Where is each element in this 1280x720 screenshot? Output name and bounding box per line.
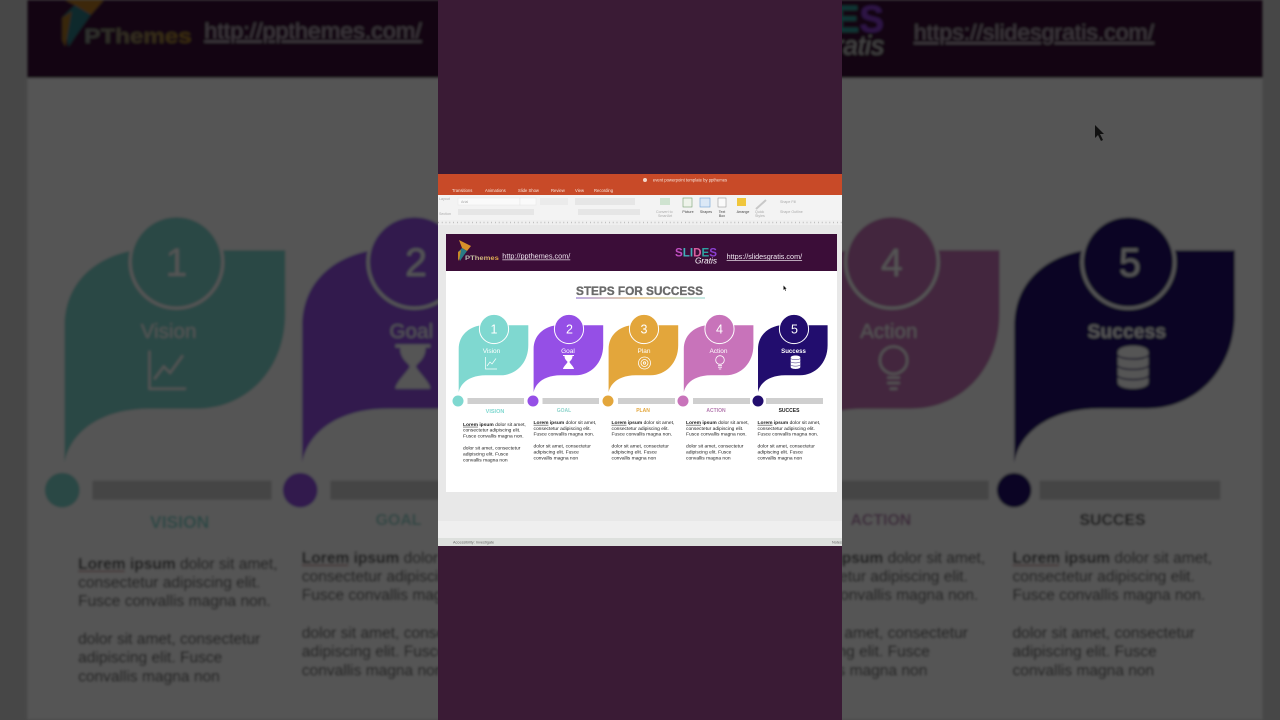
icon: database xyxy=(791,355,800,369)
background: enlarged dimmed slide: convallis magna non xyxy=(302,662,443,679)
background: enlarged dimmed slide: consectetur adipiscing elit. xyxy=(302,568,484,585)
ribbon tabs xyxy=(452,188,614,193)
background: enlarged dimmed slide: VISION xyxy=(150,512,209,532)
step 4: action: Action xyxy=(709,348,728,355)
step 1: vision xyxy=(452,314,528,463)
ribbon toolbar: Section xyxy=(439,212,451,216)
background: enlarged dimmed slide: Lorem ipsum dolor sit amet, xyxy=(786,550,985,567)
background: enlarged dimmed slide: GOAL xyxy=(376,512,422,529)
logo: Slides Gratis: SLIDES xyxy=(675,246,717,260)
step 2: goal: Goal xyxy=(561,348,575,355)
step 1: vision: Lorem ipsum dolor sit amet, xyxy=(463,423,526,428)
step 2: goal: consectetur adipiscing elit. xyxy=(534,426,591,432)
icon: light bulb xyxy=(716,356,724,369)
background: enlarged dimmed slide: Fusce convallis magna non. xyxy=(1013,587,1205,604)
background: enlarged dimmed slide: Action xyxy=(860,320,917,343)
background: enlarged dimmed slide: Fusce convallis magna non. xyxy=(302,587,494,604)
background: enlarged dimmed slide: PThemes xyxy=(84,25,192,48)
ribbon toolbar: Box xyxy=(719,214,725,218)
background: enlarged dimmed slide: adipiscing elit. Fusce xyxy=(549,644,694,661)
background: enlarged dimmed slide: Fusce convallis magna non. xyxy=(78,593,271,610)
background: enlarged dimmed slide: dolor sit amet, consectetur xyxy=(549,625,732,642)
icon: line chart xyxy=(486,357,497,369)
ribbon tabs: Recording xyxy=(594,188,614,193)
step 2: goal: 2 xyxy=(566,322,573,336)
step 3: plan: PLAN xyxy=(636,408,650,414)
step 2: goal: GOAL xyxy=(557,408,571,414)
step 3: plan: Lorem ipsum dolor sit amet, xyxy=(612,421,674,426)
background: enlarged dimmed slide: Lorem ipsum dolor sit amet, xyxy=(549,550,749,567)
ribbon toolbar: Shape Fill xyxy=(780,200,796,204)
ribbon toolbar: Shapes xyxy=(700,210,712,214)
ribbon tabs: View xyxy=(575,188,585,193)
step 1: vision: Fusce convallis magna non. xyxy=(463,434,524,440)
notes area xyxy=(438,521,842,538)
step 3: plan: adipiscing elit. Fusce xyxy=(612,450,657,456)
step 2: goal: Lorem ipsum dolor sit amet, xyxy=(534,421,596,426)
step 1: vision: adipiscing elit. Fusce xyxy=(463,451,509,457)
ribbon toolbar: Arial xyxy=(461,200,468,204)
background: enlarged dimmed slide: adipiscing elit. Fusce xyxy=(302,644,446,661)
step 5: success xyxy=(752,314,828,461)
icon: hourglass xyxy=(563,355,574,369)
background: enlarged dimmed slide: dolor sit amet, consectetur xyxy=(786,625,968,642)
background: enlarged dimmed slide: Fusce convallis magna non. xyxy=(549,587,742,604)
ribbon toolbar: Quick xyxy=(755,210,764,214)
step 5: success: Fusce convallis magna non. xyxy=(758,432,818,438)
background: enlarged dimmed slide: Lorem ipsum dolor sit amet, xyxy=(1013,550,1212,567)
step 3: plan xyxy=(602,314,678,461)
ribbon toolbar: Layout xyxy=(439,197,450,201)
ribbon tabs: Transitions xyxy=(452,188,472,193)
step 2: goal: convallis magna non xyxy=(534,455,578,461)
background: enlarged dimmed slide: consectetur adipiscing elit. xyxy=(549,568,732,585)
step 1: vision: VISION xyxy=(486,409,504,415)
ribbon toolbar: Text xyxy=(719,210,725,214)
slide xyxy=(446,234,837,492)
background: enlarged dimmed slide: 1 xyxy=(165,241,187,285)
background: enlarged dimmed slide: adipiscing elit. Fusce xyxy=(786,644,930,661)
background: enlarged dimmed slide: convallis magna non xyxy=(1013,662,1154,679)
step 1: vision: 1 xyxy=(491,322,498,336)
step 4: action: adipiscing elit. Fusce xyxy=(686,450,732,456)
step 4: action: Fusce convallis magna non. xyxy=(686,432,747,438)
step 4: action: ACTION xyxy=(706,408,726,414)
background: enlarged dimmed slide: Lorem ipsum dolor sit amet, xyxy=(78,556,278,573)
background: enlarged dimmed slide: 4 xyxy=(881,241,903,285)
background: enlarged dimmed slide: 2 xyxy=(405,241,427,285)
icon: target xyxy=(638,357,650,369)
step 5: success: convallis magna non xyxy=(758,455,802,461)
step 4: action: Lorem ipsum dolor sit amet, xyxy=(686,421,749,426)
ribbon tabs: Review xyxy=(551,188,566,193)
step 3: plan: Plan xyxy=(637,348,651,355)
ribbon toolbar: SmartArt xyxy=(658,214,672,218)
background: enlarged dimmed slide: dolor sit amet, consectetur xyxy=(302,625,484,642)
step 1: vision: dolor sit amet, consectetur xyxy=(463,446,521,452)
background: enlarged dimmed slide: convallis magna non xyxy=(78,668,220,685)
icon: mouse cursor xyxy=(784,286,787,291)
status bar: Accessibility: Investigate xyxy=(453,540,494,544)
step 2: goal: dolor sit amet, consectetur xyxy=(534,444,591,450)
step 3: plan: 3 xyxy=(641,322,648,336)
background: enlarged dimmed slide: dolor sit amet, consectetur xyxy=(78,631,260,648)
logo: PThemes: PThemes xyxy=(465,255,499,262)
background: enlarged dimmed slide: Goal xyxy=(389,320,433,343)
step 5: success: dolor sit amet, consectetur xyxy=(758,444,815,450)
background: enlarged dimmed slide: dolor sit amet, consectetur xyxy=(1013,625,1195,642)
step 2: goal: adipiscing elit. Fusce xyxy=(534,450,579,456)
step 3: plan: Fusce convallis magna non. xyxy=(612,432,672,438)
step 4: action xyxy=(678,314,753,461)
background: enlarged dimmed slide: Fusce convallis magna non. xyxy=(786,587,978,604)
slide header banner xyxy=(446,234,837,271)
step 4: action: dolor sit amet, consectetur xyxy=(686,444,744,450)
step 1: vision: Vision xyxy=(483,348,501,355)
step 5: success: 5 xyxy=(791,322,798,336)
title bar xyxy=(438,174,842,195)
step 3: plan: consectetur adipiscing elit. xyxy=(612,426,669,432)
background: enlarged dimmed slide: Gratis xyxy=(814,30,884,60)
step 3: plan: convallis magna non xyxy=(612,455,656,461)
status bar: Notes xyxy=(832,540,842,544)
ribbon toolbar: Shape Outline xyxy=(780,210,803,214)
step 5: success: adipiscing elit. Fusce xyxy=(758,450,803,456)
logo: Slides Gratis: Gratis xyxy=(695,256,718,266)
step 2: goal xyxy=(528,314,603,461)
logo: PThemes xyxy=(458,240,499,262)
step 4: action: consectetur adipiscing elit. xyxy=(686,426,743,432)
background: enlarged dimmed slide: https://slidesgratis.com/ xyxy=(914,20,1155,45)
background: enlarged dimmed slide: 5 xyxy=(1119,241,1141,285)
step 5: success: Lorem ipsum dolor sit amet, xyxy=(758,421,820,426)
background: enlarged dimmed slide: ACTION xyxy=(850,512,911,529)
title: STEPS FOR SUCCESS xyxy=(576,284,703,298)
background: enlarged dimmed slide: consectetur adipiscing elit. xyxy=(78,574,260,591)
step 5: success: Success xyxy=(781,348,806,355)
background: enlarged dimmed slide: Lorem ipsum dolor sit amet, xyxy=(302,550,501,567)
bottom purple band xyxy=(438,546,842,720)
top purple band xyxy=(438,0,842,174)
step 2: goal: Fusce convallis magna non. xyxy=(534,432,594,438)
background: enlarged dimmed slide: PLAN xyxy=(628,512,671,529)
ribbon toolbar: Convert to xyxy=(656,210,673,214)
step 1: vision: consectetur adipiscing elit. xyxy=(463,428,520,434)
powerpoint window xyxy=(438,174,842,546)
step 5: success: consectetur adipiscing elit. xyxy=(758,426,815,432)
step 3: plan: dolor sit amet, consectetur xyxy=(612,444,669,450)
status bar xyxy=(438,538,842,546)
ribbon toolbar xyxy=(438,195,842,220)
ribbon tabs: Animations xyxy=(485,188,506,193)
background: enlarged dimmed slide: adipiscing elit. Fusce xyxy=(1013,644,1157,661)
ribbon toolbar: Picture xyxy=(682,210,694,214)
step 1: vision: convallis magna non xyxy=(463,457,508,463)
link: slidesgratis: https://slidesgratis.com/ xyxy=(727,254,802,261)
ribbon toolbar: Arrange xyxy=(737,210,749,214)
ruler xyxy=(438,220,842,225)
step 5: success: SUCCES xyxy=(779,408,800,414)
background: enlarged dimmed slide: SLIDES xyxy=(751,0,884,41)
background: enlarged dimmed slide: 3 xyxy=(641,241,663,285)
ribbon toolbar: Styles xyxy=(755,214,765,218)
title bar: event powerpoint template by ppthemes xyxy=(653,178,727,182)
logo: Slides Gratis xyxy=(675,246,718,266)
background: enlarged dimmed slide: consectetur adipiscing elit. xyxy=(786,568,968,585)
step 4: action: convallis magna non xyxy=(686,455,731,461)
background: enlarged dimmed slide: adipiscing elit. Fusce xyxy=(78,650,222,667)
background: enlarged dimmed slide: consectetur adipiscing elit. xyxy=(1013,568,1195,585)
link: ppthemes: http://ppthemes.com/ xyxy=(502,254,570,260)
background: enlarged dimmed slide: convallis magna non xyxy=(549,662,691,679)
step 4: action: 4 xyxy=(716,322,723,336)
background: enlarged dimmed slide: Vision xyxy=(141,320,196,343)
background: enlarged dimmed slide: Plan xyxy=(632,320,673,343)
background: enlarged dimmed slide: SUCCES xyxy=(1079,512,1146,529)
background: enlarged dimmed slide: Success xyxy=(1088,321,1166,343)
background: enlarged dimmed slide: http://ppthemes.com/ xyxy=(204,18,423,43)
background: enlarged dimmed slide: convallis magna non xyxy=(786,662,927,679)
ribbon tabs: Slide Show xyxy=(518,188,540,193)
